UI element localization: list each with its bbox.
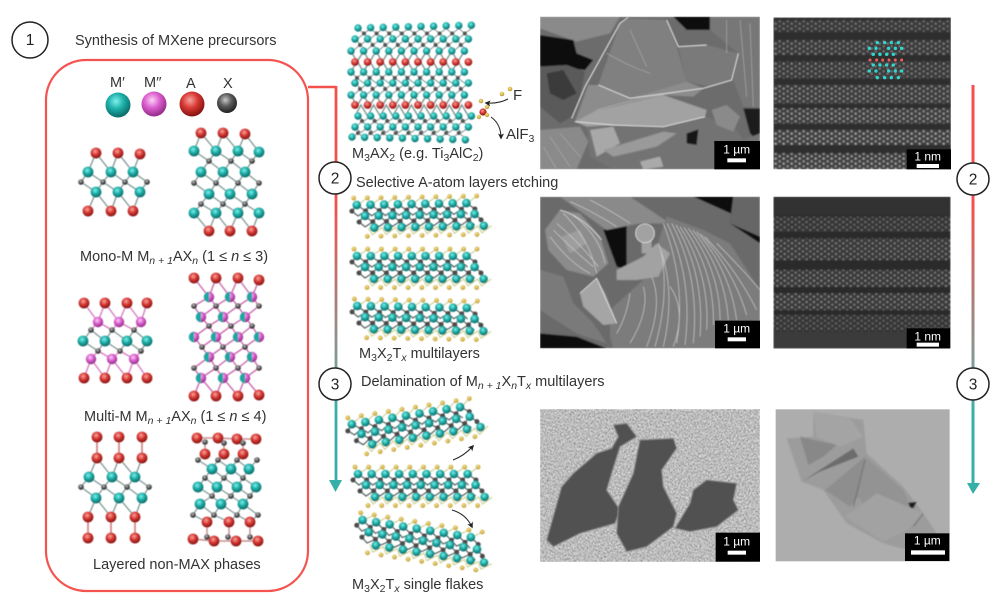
step 2 badge right: 2	[969, 172, 977, 188]
crystal: multi-M thick	[189, 273, 264, 401]
caption: multi-M: n ≤ 4)	[229, 409, 266, 425]
caption: single flakes: 2	[380, 583, 386, 595]
etching reaction: F atoms and AlF3 arrows	[477, 87, 534, 145]
crystal: layered non-MAX thick	[188, 433, 263, 546]
caption: multilayers: 3	[371, 352, 377, 364]
caption: multilayers: x	[400, 352, 407, 364]
caption: layered non-MAX: Layered non-MAX phases	[93, 557, 261, 573]
legend: element colours	[106, 75, 237, 118]
caption: multilayers: multilayers	[407, 346, 480, 362]
heading: step 3 delamination: Delamination of M	[361, 374, 478, 390]
arrow: process flow left	[308, 86, 342, 492]
caption: M3AX2: M	[352, 146, 364, 162]
micrograph: etched multilayer SEM: 1 µm	[723, 322, 750, 336]
structure: M3AX2 lattice	[347, 21, 475, 144]
caption: mono-M: AX	[173, 249, 193, 265]
crystal: mono-M thin	[78, 148, 150, 216]
caption: mono-M: n ≤ 3)	[231, 249, 268, 265]
heading: synthesis of MXene precursors: Synthesis of MXene precursors	[75, 33, 276, 49]
etching reaction: F atoms and AlF3 arrows: F	[513, 87, 522, 104]
structure: M3X2Tx multilayers	[349, 193, 492, 342]
heading: step 3 delamination: n + 1	[478, 380, 502, 392]
micrograph: MAX SEM: 1 µm	[723, 142, 750, 156]
step 2 badge left	[319, 162, 351, 194]
step 2 badge left: 2	[331, 170, 339, 188]
caption: single flakes: M	[352, 577, 364, 593]
step 3 badge left: 3	[331, 376, 339, 394]
caption: multilayers: X	[377, 346, 387, 362]
crystal: layered non-MAX thin	[78, 432, 152, 543]
etching reaction: F atoms and AlF3 arrows: 3	[528, 133, 534, 145]
caption: single flakes: X	[370, 577, 380, 593]
heading: step 3 delamination: multilayers	[531, 374, 604, 390]
micrograph: etched multilayer SEM	[540, 197, 760, 348]
caption: single flakes: single flakes	[400, 577, 483, 593]
legend: element colours: X	[223, 76, 233, 92]
caption: mono-M: n	[192, 255, 198, 267]
arrow: process flow right	[967, 85, 980, 494]
caption: M3AX2: )	[479, 146, 483, 162]
caption: single flakes: 3	[364, 583, 370, 595]
crystal: mono-M thick	[189, 128, 264, 236]
micrograph: single flakes SEM	[540, 409, 760, 562]
micrograph: etched multilayer STEM: 1 nm	[914, 330, 941, 344]
micrograph: single flakes TEM	[776, 409, 950, 561]
caption: M3AX2: AX	[370, 146, 390, 162]
micrograph: MAX STEM: 1 nm	[914, 150, 941, 164]
caption: mono-M: n + 1	[149, 255, 173, 267]
step 3 badge right	[957, 368, 989, 400]
legend: element colours: A	[186, 76, 196, 92]
micrograph: single flakes TEM: 1 µm	[914, 534, 941, 548]
caption: M3AX2: 3	[443, 152, 449, 164]
caption: single flakes: x	[393, 583, 400, 595]
etching reaction: F atoms and AlF3 arrows: AlF	[506, 126, 528, 143]
step 2 badge right	[957, 163, 989, 195]
caption: multi-M: n + 1	[148, 415, 171, 427]
caption: multi-M: Multi-M M	[84, 409, 148, 425]
legend: element colours: M′′	[144, 75, 162, 91]
panel: MAX phase precursors	[46, 60, 308, 591]
caption: multilayers: M	[359, 346, 371, 362]
caption: multilayers: T	[392, 346, 401, 362]
crystal: multi-M thin	[78, 298, 152, 383]
caption: multi-M: AX	[171, 409, 191, 425]
caption: multilayers: 2	[387, 352, 393, 364]
structure: M3X2Tx single flakes	[343, 394, 497, 575]
micrograph: MAX SEM	[540, 17, 760, 169]
caption: M3AX2: 3	[364, 152, 370, 164]
caption: M3AX2: 2	[473, 152, 479, 164]
legend: element colours: M′	[110, 75, 125, 91]
heading: step 3 delamination: X	[502, 374, 512, 390]
heading: step 2 etching: Selective A-atom layers etching	[356, 175, 558, 191]
caption: single flakes: T	[385, 577, 394, 593]
micrograph: single flakes SEM: 1 µm	[723, 534, 750, 548]
micrograph: etched multilayer STEM	[773, 197, 951, 349]
caption: M3AX2: (e.g. Ti	[395, 146, 443, 162]
caption: multi-M: n	[191, 415, 197, 427]
caption: mono-M: (1 ≤	[198, 249, 231, 265]
step 3 badge left	[319, 368, 351, 400]
step 1 badge	[12, 22, 48, 58]
step 1 badge: 1	[26, 32, 34, 49]
heading: step 3 delamination: T	[517, 374, 526, 390]
caption: mono-M: Mono-M M	[80, 249, 149, 265]
caption: M3AX2: 2	[389, 152, 395, 164]
caption: M3AX2: AlC	[449, 146, 473, 162]
caption: multi-M: (1 ≤	[196, 409, 229, 425]
micrograph: MAX STEM	[773, 17, 951, 169]
heading: step 3 delamination: n	[511, 380, 517, 392]
step 3 badge right: 3	[969, 376, 977, 394]
heading: step 3 delamination: x	[525, 380, 532, 392]
